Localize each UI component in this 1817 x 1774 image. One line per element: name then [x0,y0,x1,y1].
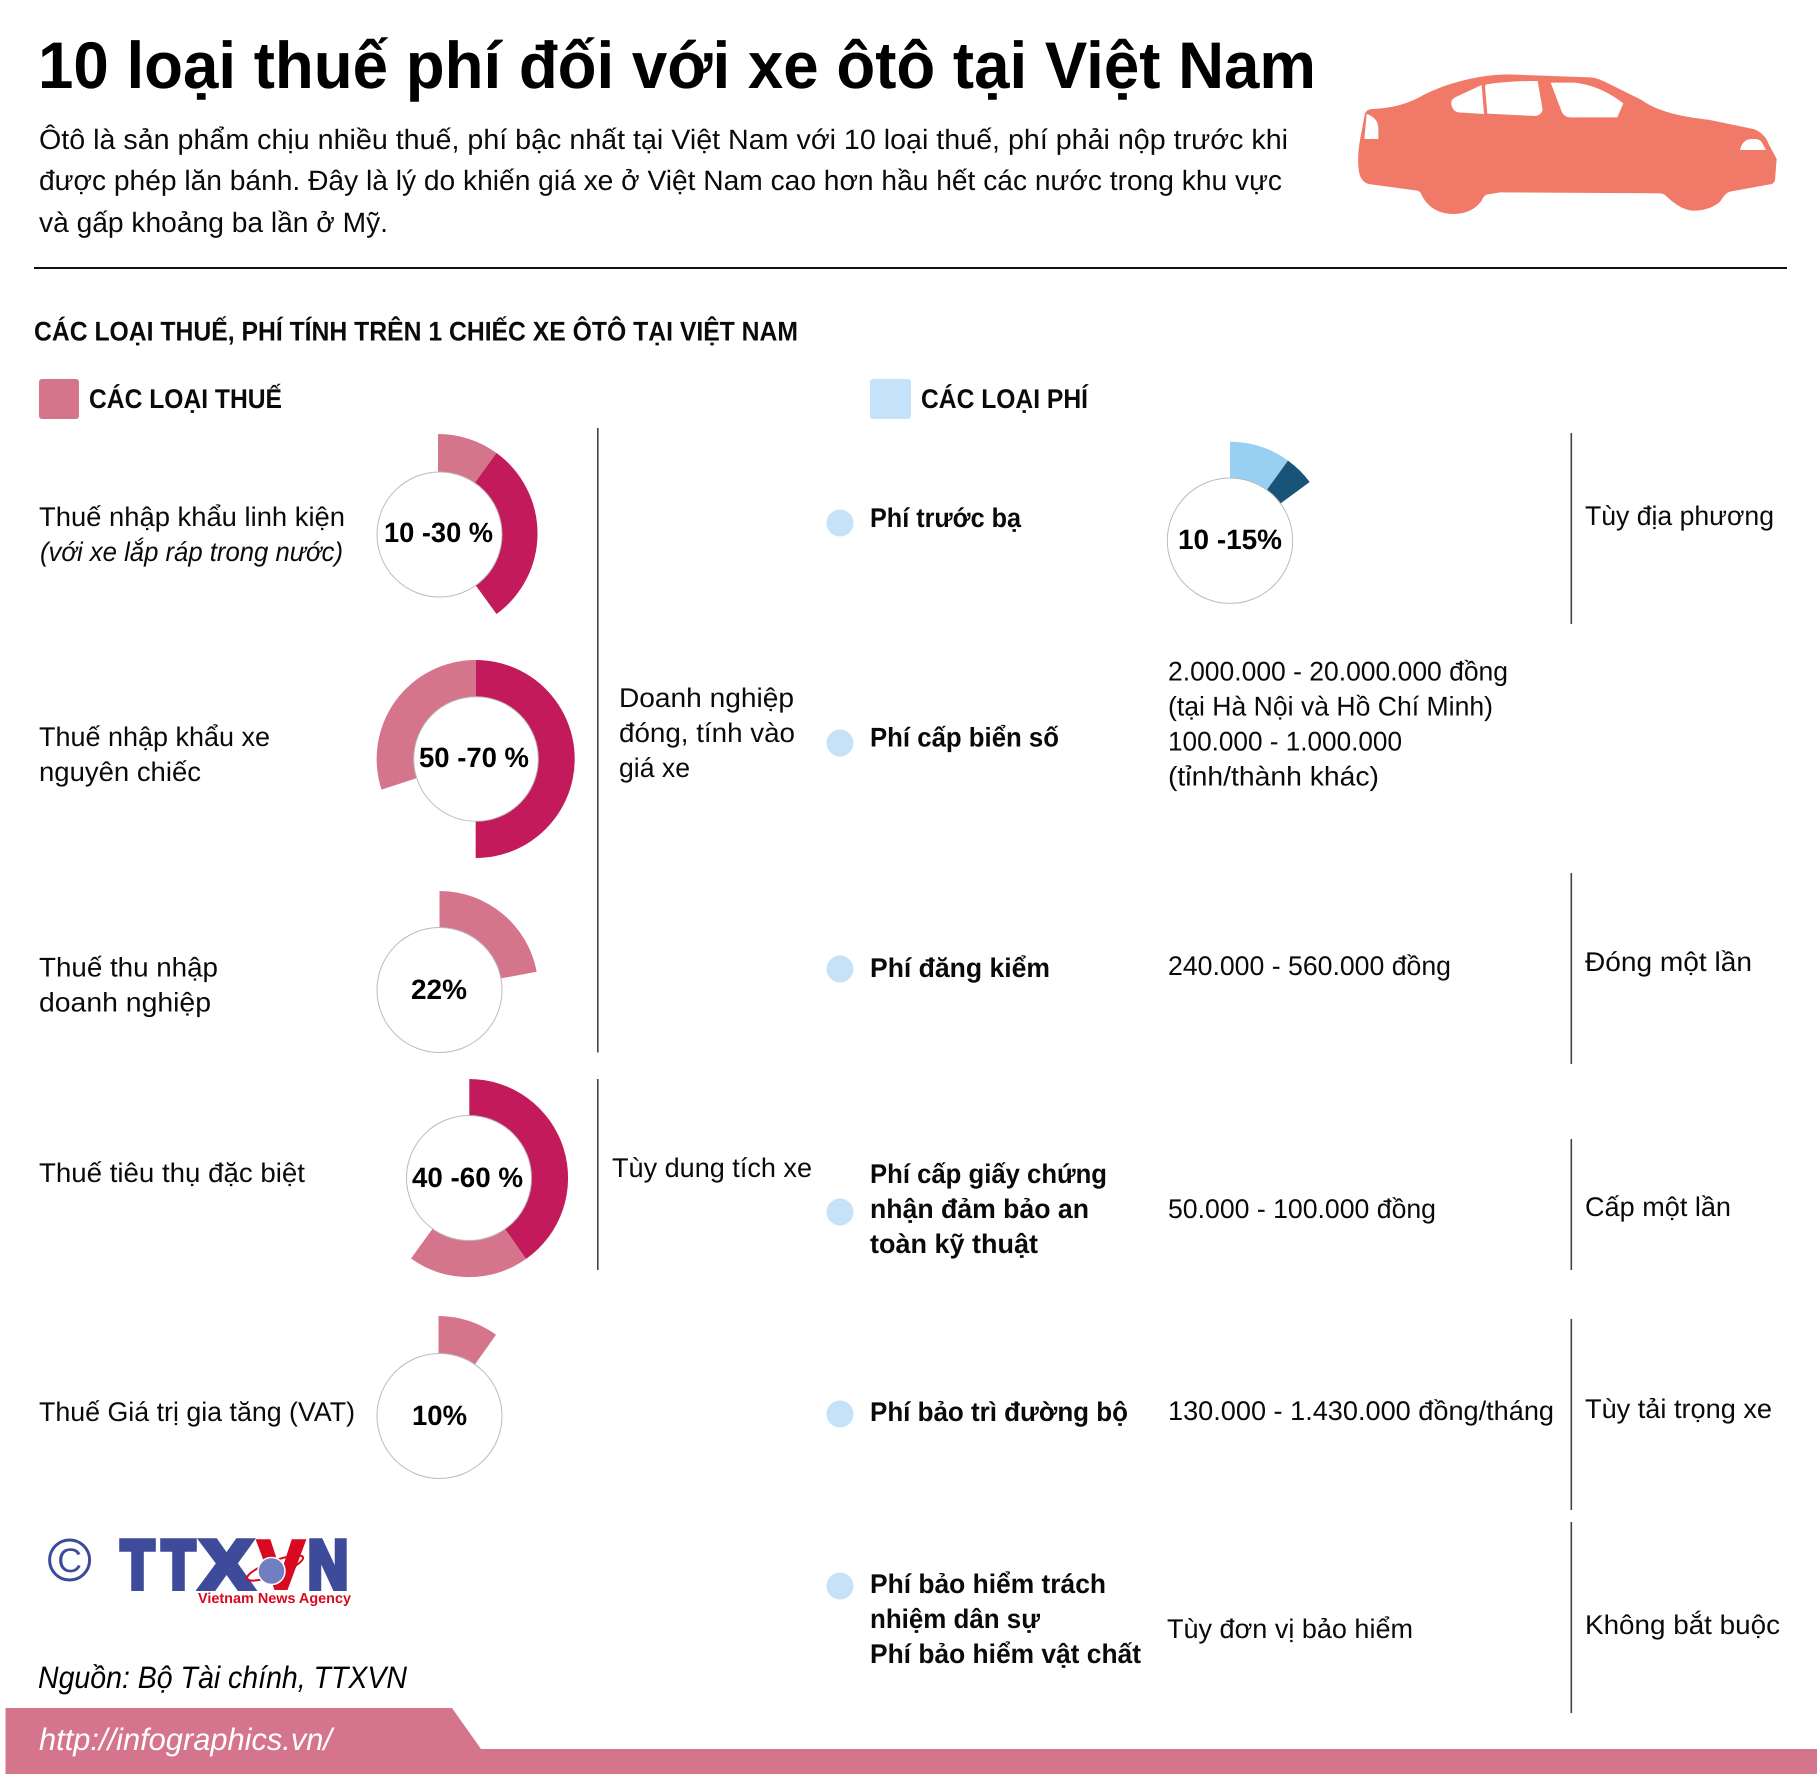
header [38,28,1777,238]
note: engine capacity: Tùy dung tích xe [612,1153,812,1183]
donut: 22%: 22% [411,974,467,1005]
icon: car silhouette [1358,74,1777,214]
legend: fees: CÁC LOẠI PHÍ [921,384,1089,414]
panel: taxes [39,434,575,1478]
fee 4: safety certificate: 50.000 - 100.000 đồng [1168,1194,1436,1224]
icon: copyright: C [57,1542,82,1580]
fee 6: insurance: nhiệm dân sự [870,1604,1040,1634]
fee 2: license plate: (tại Hà Nội và Hồ Chí Minh) [1168,692,1493,722]
donut: 40-60% [406,1079,568,1277]
footer band: http://infographics.vn/ [39,1722,335,1757]
intro paragraph [39,124,1288,238]
fee 6: insurance: Phí bảo hiểm vật chất [870,1639,1141,1669]
fee 2: license plate: 2.000.000 - 20.000.000 đồng [1168,656,1508,686]
fee 4: safety certificate: Phí cấp giấy chứng [870,1159,1107,1189]
tax 1 label [39,502,345,567]
donut: 10%: 10% [412,1400,467,1431]
fee 1: registration: 10 -15% [1178,524,1282,555]
footer band [6,1708,1817,1774]
fee 3: inspection: 240.000 - 560.000 đồng [1168,951,1451,981]
tax 3 label: Thuế thu nhập [39,952,218,982]
fee 2: license plate: Phí cấp biển số [870,722,1059,752]
fee 2: license plate: 100.000 - 1.000.000 [1168,726,1402,756]
fee 5: road maintenance [826,1319,1772,1510]
fee 6: insurance: Không bắt buộc [1585,1610,1780,1640]
logo: TTXVN: Vietnam News Agency [198,1591,351,1607]
note: enterprise pays: đóng, tính vào [619,718,795,748]
section heading: CÁC LOẠI THUẾ, PHÍ TÍNH TRÊN 1 CHIẾC XE ÔTÔ TẠI VIỆT NAM [34,316,798,346]
legend: fees [870,379,1089,419]
donut: 10-30% [377,434,538,614]
fee 6: insurance: Tùy đơn vị bảo hiểm [1167,1614,1413,1644]
note: enterprise pays [597,428,795,1052]
tax 2 label [39,722,270,787]
tax 4 label: Thuế tiêu thụ đặc biệt [39,1158,306,1188]
legend: taxes [39,379,282,419]
tax 2 label: nguyên chiếc [39,757,201,787]
logo: TTXVN: V [258,1527,304,1603]
intro paragraph: Ôtô là sản phẩm chịu nhiều thuế, phí bậc nhất tại Việt Nam với 10 loại thuế, phí phải nộp trước khi [39,124,1288,155]
fee 2: license plate: (tỉnh/thành khác) [1168,762,1379,792]
tax 3 label [39,952,218,1018]
donut: 10-30%: 10 -30 % [384,517,493,548]
fee 5: road maintenance: Phí bảo trì đường bộ [870,1397,1128,1427]
fee 6: insurance: Phí bảo hiểm trách [870,1569,1106,1599]
logo: TTXVN: X [201,1527,252,1603]
donut: 50-70%: 50 -70 % [419,742,529,773]
tax 1 label: (với xe lắp ráp trong nước) [40,537,343,567]
fee 3: inspection [826,873,1752,1064]
fee 3: inspection: Đóng một lần [1585,947,1752,977]
fee 4: safety certificate [826,1139,1731,1270]
tax 2 label: Thuế nhập khẩu xe [39,722,270,752]
tax 3 label: doanh nghiệp [39,988,211,1018]
donut: 40-60%: 40 -60 % [412,1162,523,1193]
logo: TTXVN: T [121,1527,154,1603]
source: Nguồn: Bộ Tài chính, TTXVN [38,1660,408,1695]
panel: fees [826,433,1780,1713]
fee 4: safety certificate: toàn kỹ thuật [870,1229,1038,1259]
donut: 10% [377,1316,502,1478]
fee 1: registration [826,433,1774,624]
note: enterprise pays: Doanh nghiệp [619,683,794,713]
legend: taxes: CÁC LOẠI THUẾ [89,383,282,414]
fee 4: safety certificate: Cấp một lần [1585,1192,1731,1222]
title: 10 loại thuế phí đối với xe ôtô tại Việt Nam [38,28,1316,102]
note: enterprise pays: giá xe [619,753,690,783]
logo: TTXVN: N [308,1527,348,1603]
logo: TTXVN [50,1527,351,1607]
intro paragraph: và gấp khoảng ba lần ở Mỹ. [39,207,388,238]
fee 4: safety certificate: nhận đảm bảo an [870,1194,1089,1224]
fee 5: road maintenance: Tùy tải trọng xe [1585,1394,1772,1424]
fee 1: registration: Tùy địa phương [1585,501,1774,531]
fee 5: road maintenance: 130.000 - 1.430.000 đồng/tháng [1168,1396,1554,1426]
fee 1: registration: Phí trước bạ [870,503,1022,533]
tax 1 label: Thuế nhập khẩu linh kiện [39,502,345,532]
tax 5 label: Thuế Giá trị gia tăng (VAT) [39,1397,355,1427]
intro paragraph: được phép lăn bánh. Đây là lý do khiến giá xe ở Việt Nam cao hơn hầu hết các nước trong khu vực [39,165,1282,196]
fee 2: license plate [826,656,1508,792]
icon: copyright [50,1540,90,1580]
donut: 22% [377,891,537,1052]
donut: 50-70% [377,660,575,858]
logo: TTXVN: T [162,1527,195,1603]
fee 3: inspection: Phí đăng kiểm [870,953,1050,983]
fee 6: insurance [826,1522,1780,1713]
divider [34,267,1787,269]
